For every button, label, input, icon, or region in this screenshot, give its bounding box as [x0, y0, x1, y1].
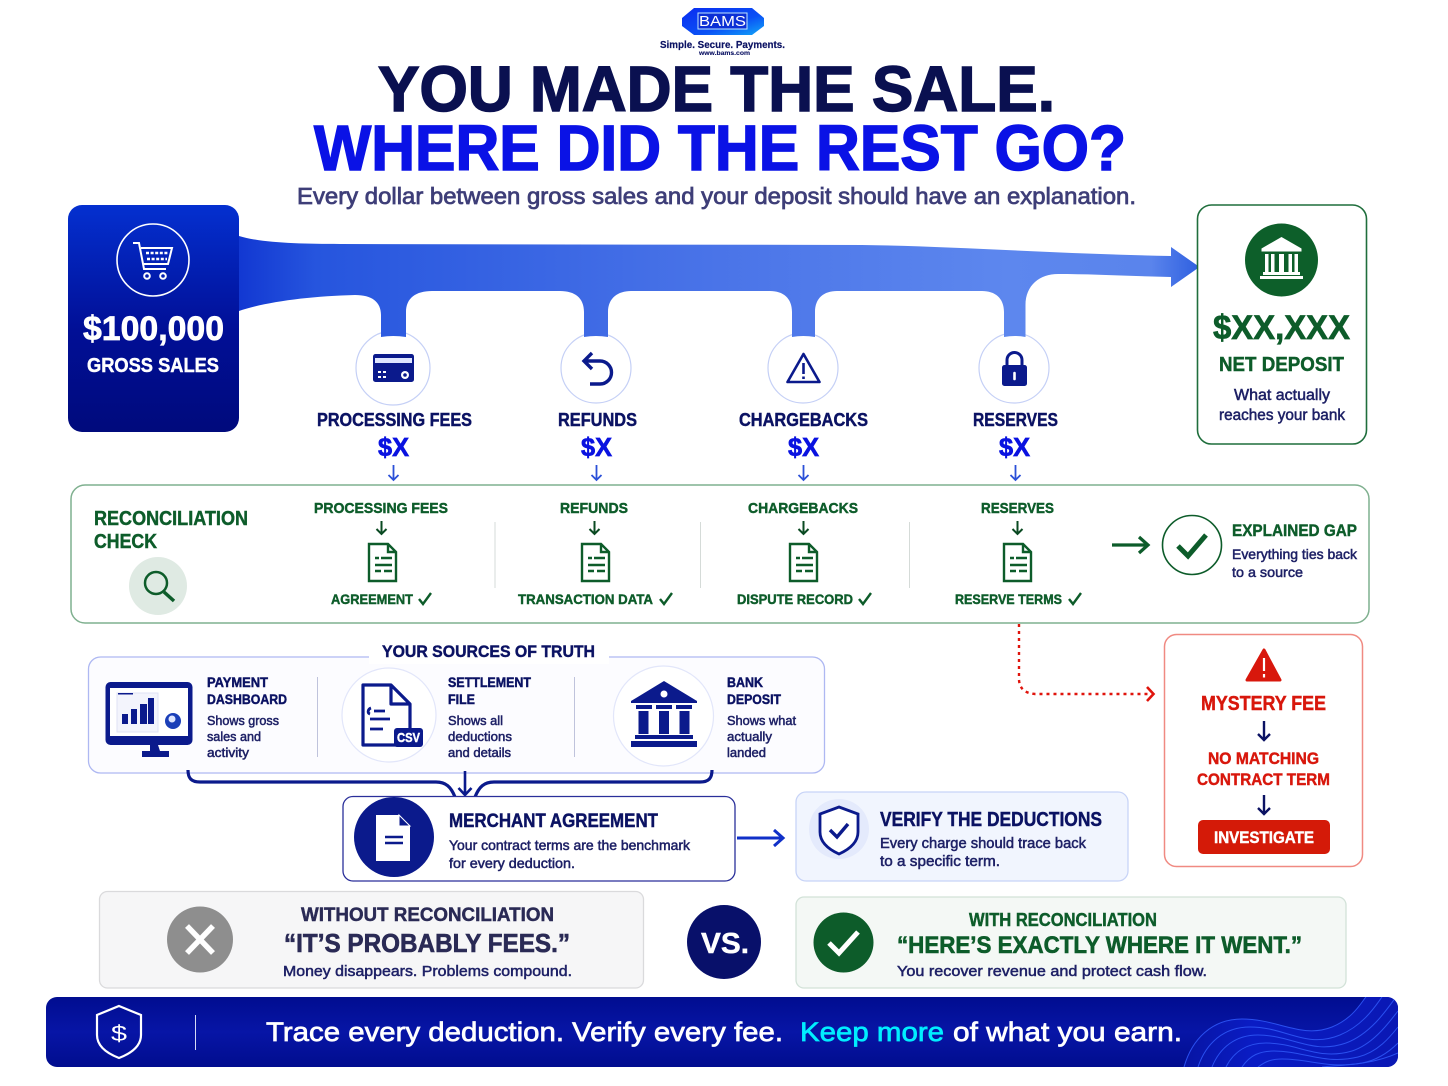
- source: payment dashboard: activity: [207, 745, 250, 760]
- source: payment dashboard: PAYMENT: [207, 675, 269, 690]
- panel: mystery fee: NO MATCHING: [1208, 749, 1319, 768]
- panel: verify the deductions: VERIFY THE DEDUCTIONS: [880, 809, 1102, 831]
- panel: reconciliation check: RECONCILIATION: [94, 508, 248, 530]
- icon: document in circle: [354, 797, 434, 877]
- arrow: dotted red to mystery fee: [1019, 624, 1154, 701]
- branch icon circles: [356, 331, 1049, 405]
- icon: warning triangle: [788, 354, 820, 382]
- source: settlement file: deductions: [448, 729, 512, 744]
- icon: monitor: [106, 682, 192, 757]
- panel: merchant agreement: MERCHANT AGREEMENT: [449, 811, 658, 832]
- panel: verify the deductions: to a specific term.: [880, 854, 1000, 870]
- panel: reconciliation check: [71, 485, 1369, 623]
- branch: refunds: REFUNDS: [558, 410, 637, 430]
- source: bank deposit: DEPOSIT: [727, 692, 782, 707]
- branch: chargebacks: [739, 354, 868, 480]
- source: payment dashboard: DASHBOARD: [207, 692, 287, 707]
- icon: dollar shield: $: [111, 1021, 127, 1046]
- branch: reserves: $X: [999, 432, 1031, 462]
- panel: with reconciliation: WITH RECONCILIATION: [969, 910, 1157, 930]
- panel: merchant agreement: [343, 796, 735, 881]
- panel: sources of truth: [88, 642, 824, 773]
- explained gap text: EXPLAINED GAP: [1232, 521, 1357, 540]
- branch: chargebacks: CHARGEBACKS: [739, 410, 868, 430]
- panel: gross sales: [68, 205, 239, 432]
- source: settlement file: [342, 668, 532, 762]
- title: YOU MADE THE SALE.: [378, 53, 1055, 125]
- arrow: to verify the deductions: [737, 830, 783, 846]
- branch: refunds: [558, 353, 637, 480]
- check column: processing fees: [314, 500, 448, 607]
- source: payment dashboard: [106, 675, 287, 760]
- icon: green check circle: [814, 912, 874, 972]
- branch: reserves: [973, 353, 1058, 480]
- panel: merchant agreement: for every deduction.: [449, 855, 575, 871]
- panel: mystery fee: CONTRACT TERM: [1197, 770, 1330, 789]
- source: payment dashboard: sales and: [207, 729, 261, 744]
- panel: mystery fee: MYSTERY FEE: [1201, 693, 1326, 715]
- icon: return arrow: [584, 353, 612, 384]
- panel: net deposit: NET DEPOSIT: [1219, 354, 1344, 376]
- check column: chargebacks: DISPUTE RECORD: [737, 591, 853, 607]
- check column: processing fees: AGREEMENT: [331, 591, 413, 607]
- icon: shopping cart: [133, 243, 172, 279]
- footer banner: [46, 997, 1398, 1067]
- panel: mystery fee: [1164, 634, 1362, 866]
- check column: refunds: REFUNDS: [560, 500, 628, 517]
- footer message: [266, 1017, 1182, 1047]
- icon: credit card: [373, 354, 414, 382]
- title: [314, 53, 1126, 184]
- panel: without reconciliation: WITHOUT RECONCILIATION: [301, 905, 554, 926]
- source: settlement file: FILE: [448, 692, 475, 707]
- check column: reserves: [955, 500, 1081, 607]
- footer message: of what you earn.: [953, 1017, 1182, 1047]
- check column: chargebacks: [737, 500, 871, 607]
- panel: sources of truth: YOUR SOURCES OF TRUTH: [382, 642, 595, 661]
- check column: reserves: RESERVE TERMS: [955, 591, 1062, 607]
- icon: check circle: [1162, 516, 1222, 574]
- icon: bank navy: [614, 666, 714, 766]
- badge: vs: [687, 905, 761, 979]
- panel: reconciliation check: CHECK: [94, 531, 157, 553]
- title: WHERE DID THE REST GO?: [314, 112, 1126, 184]
- branch: processing fees: [317, 354, 472, 480]
- panel: gross sales: $100,000: [83, 310, 224, 348]
- logo: BAMS: BAMS: [699, 13, 746, 30]
- connector: brackets into merchant agreement: [188, 770, 712, 797]
- panel: with reconciliation: You recover revenue and protect cash flow.: [897, 963, 1207, 980]
- footer message: Trace every deduction. Verify every fee.: [266, 1017, 783, 1047]
- panel: net deposit: reaches your bank: [1219, 407, 1345, 424]
- panel: gross sales: GROSS SALES: [87, 355, 219, 377]
- check column: refunds: [518, 500, 672, 607]
- panel: verify the deductions: [796, 792, 1128, 881]
- flow arrow: gross sales to net deposit with four branches: [239, 236, 1200, 337]
- source: bank deposit: Shows what: [727, 713, 796, 728]
- icon: magnifier: [129, 557, 187, 615]
- check column: processing fees: PROCESSING FEES: [314, 500, 448, 517]
- panel: with reconciliation: [796, 897, 1346, 988]
- explained gap text: to a source: [1232, 564, 1303, 580]
- panel: net deposit: What actually: [1234, 387, 1330, 404]
- panel: without reconciliation: “IT’S PROBABLY FEES.”: [284, 928, 570, 958]
- explained gap text: [1232, 521, 1358, 580]
- logo: BAMS: www.bams.com: [698, 51, 750, 57]
- check column: chargebacks: CHARGEBACKS: [748, 500, 858, 517]
- subtitle: Every dollar between gross sales and your deposit should have an explanation.: [297, 183, 1136, 209]
- panel: net deposit: $XX,XXX: [1213, 309, 1350, 347]
- source: settlement file: SETTLEMENT: [448, 675, 532, 690]
- source: settlement file: Shows all: [448, 713, 503, 728]
- panel: without reconciliation: Money disappears. Problems compound.: [283, 963, 572, 980]
- logo: BAMS: Simple. Secure. Payments.: [660, 39, 785, 51]
- badge: vs: VS.: [701, 928, 749, 960]
- icon: csv file: CSV: [397, 731, 421, 745]
- source: settlement file: and details: [448, 745, 511, 760]
- source: bank deposit: BANK: [727, 675, 763, 690]
- icon: csv file: [342, 668, 436, 762]
- panel: verify the deductions: Every charge should trace back: [880, 836, 1087, 852]
- logo: BAMS: [660, 8, 785, 57]
- branch: processing fees: PROCESSING FEES: [317, 410, 472, 430]
- check column: refunds: TRANSACTION DATA: [518, 591, 653, 607]
- button: investigate: INVESTIGATE: [1214, 828, 1314, 847]
- branch: refunds: $X: [581, 432, 613, 462]
- explained gap text: Everything ties back: [1232, 546, 1358, 562]
- source: bank deposit: landed: [727, 745, 766, 760]
- branch: processing fees: $X: [378, 432, 410, 462]
- panel: merchant agreement: Your contract terms are the benchmark: [449, 837, 691, 853]
- icon: dollar shield: [97, 1006, 141, 1058]
- source: bank deposit: actually: [727, 729, 773, 744]
- source: payment dashboard: Shows gross: [207, 713, 279, 728]
- panel: without reconciliation: [100, 892, 644, 988]
- panel: net deposit: [1198, 205, 1366, 444]
- icon: red warning triangle: [1247, 650, 1280, 680]
- footer message: Keep more: [800, 1017, 944, 1047]
- arrow: to explained gap: [1112, 537, 1148, 553]
- branch: chargebacks: $X: [788, 432, 820, 462]
- icon: bank white: [1260, 237, 1303, 279]
- icon: padlock: [1002, 353, 1027, 386]
- button: investigate: [1198, 820, 1330, 854]
- source: bank deposit: [614, 666, 796, 766]
- panel: with reconciliation: “HERE’S EXACTLY WHERE IT WENT.”: [897, 932, 1302, 959]
- icon: x circle: [167, 906, 233, 972]
- check column: reserves: RESERVES: [981, 500, 1054, 517]
- branch: reserves: RESERVES: [973, 410, 1058, 430]
- icon: shield check: [809, 799, 869, 859]
